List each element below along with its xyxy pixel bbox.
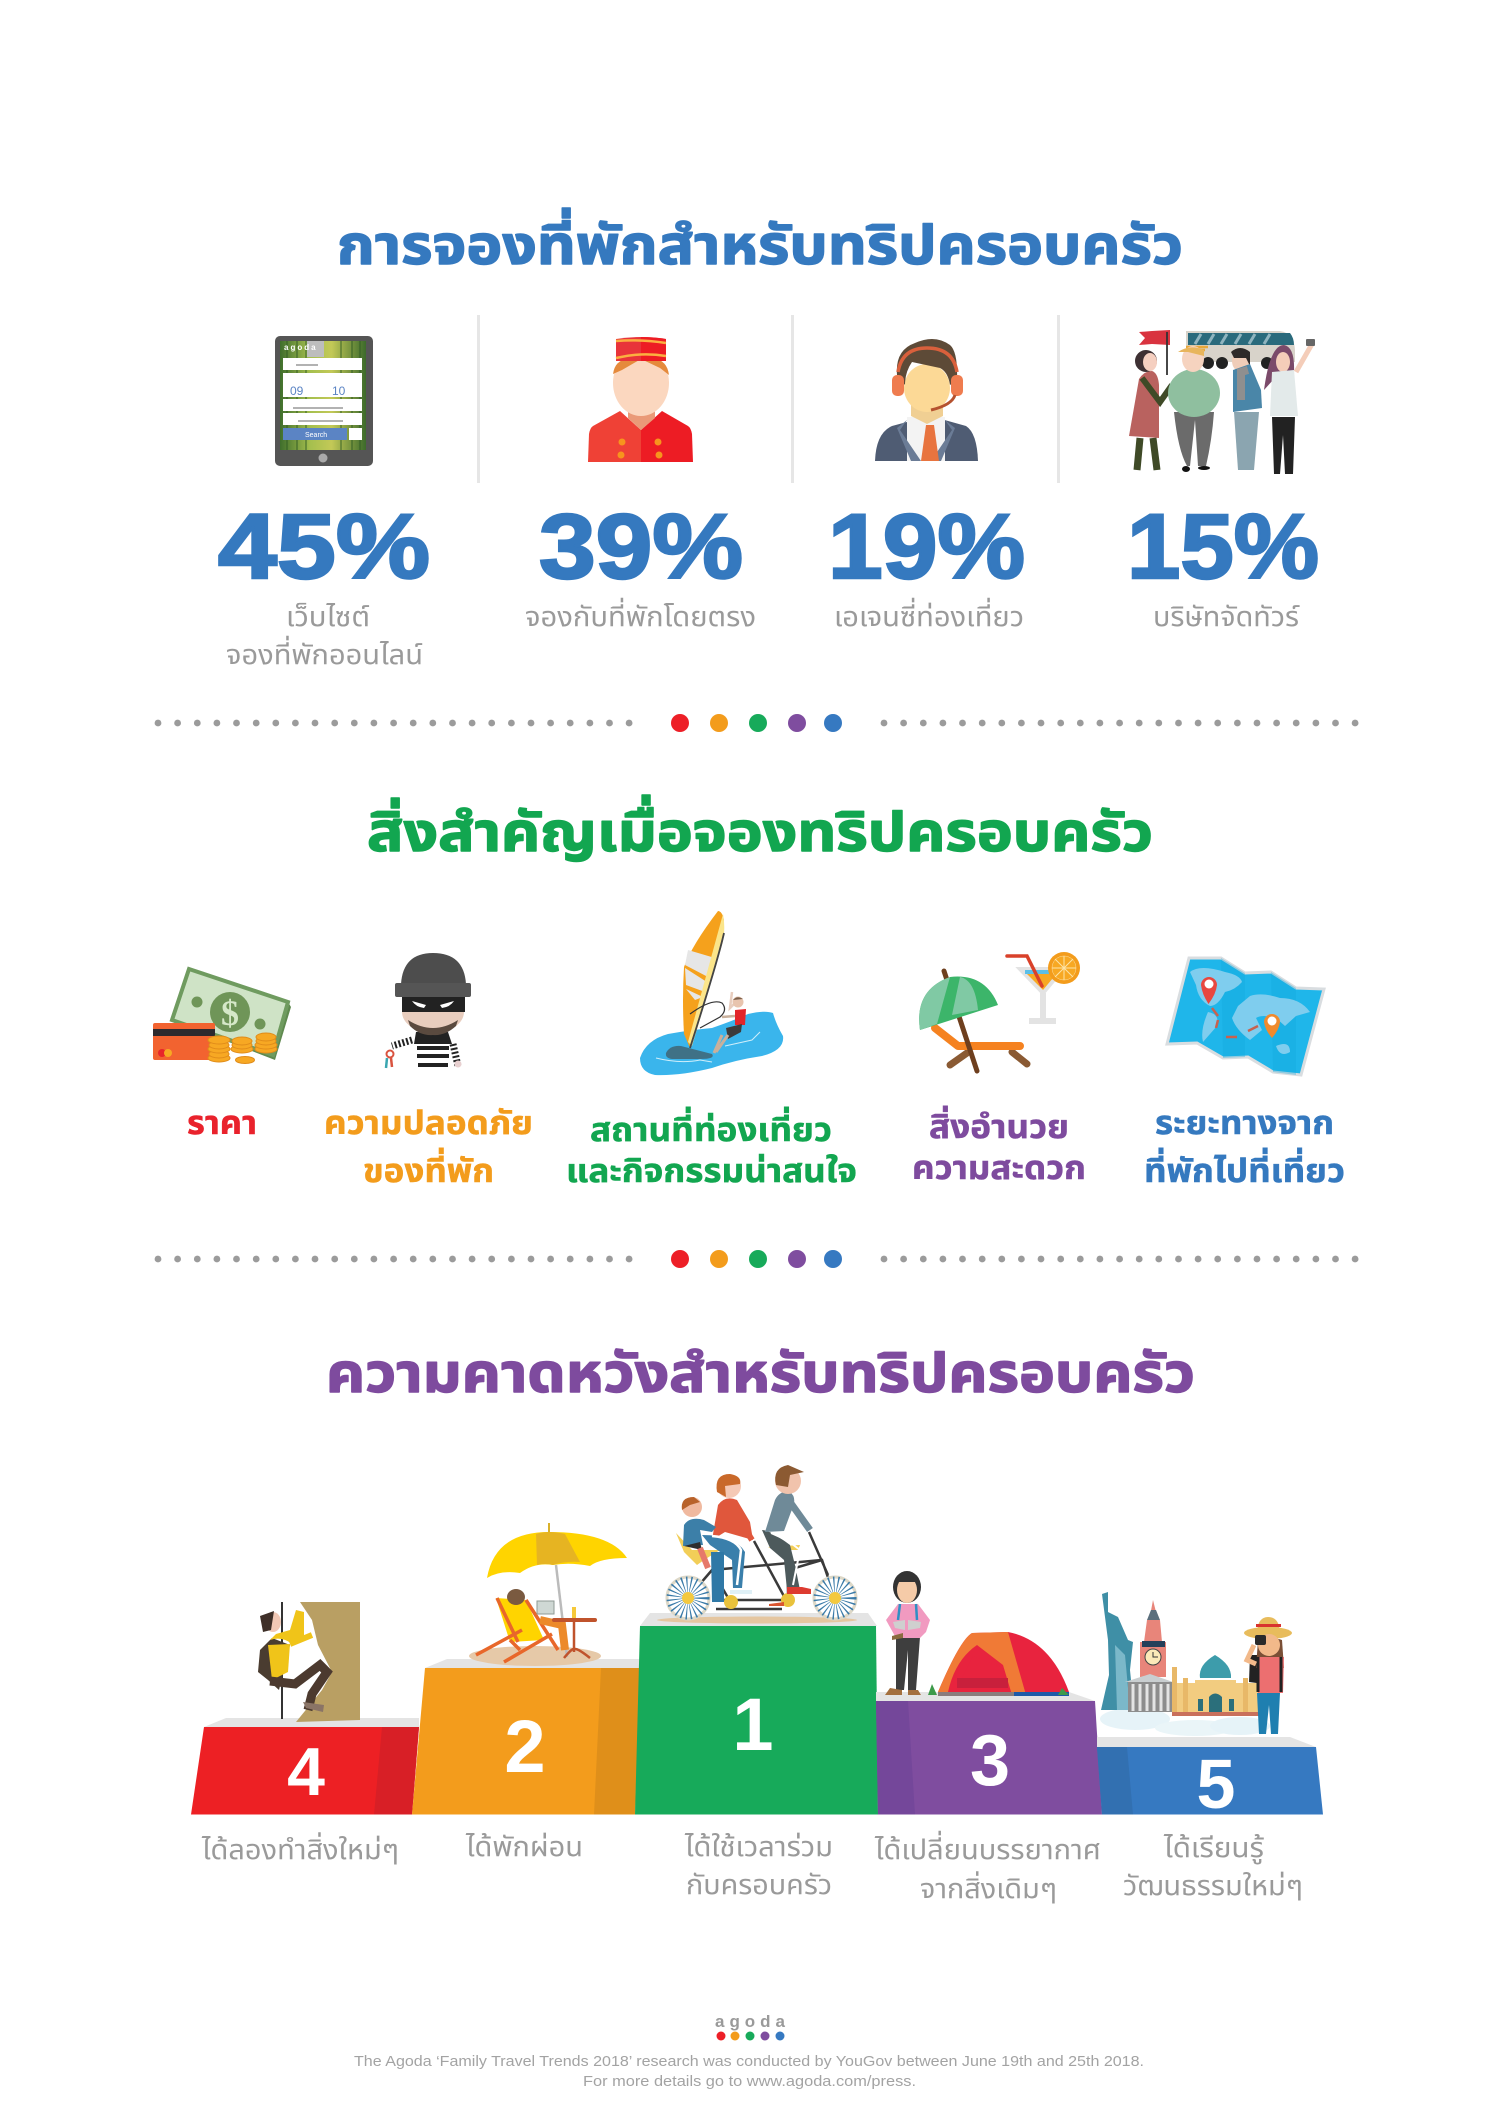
stat: 15%: 15%: [1127, 496, 1319, 598]
podium step 4: red: [191, 1718, 419, 1814]
label: direct booking: จองกับที่พักโดยตรง: [525, 597, 756, 632]
icon: windsurfer: [640, 911, 783, 1075]
footer: agoda logo and source: [354, 2012, 1144, 2090]
icon: tablet booking site: Search: [305, 432, 327, 439]
label: safety of the accommodation: [324, 1104, 533, 1189]
icon: tour group with bus: [1129, 330, 1315, 474]
illustration: rock climber: [258, 1602, 360, 1722]
label: spend time with family: กับครอบครัว: [686, 1869, 832, 1900]
label: distance to attractions: ระยะทางจาก: [1155, 1104, 1334, 1141]
source note: For more details go to www.agoda.com/press.: [583, 2073, 916, 2090]
label: spend time with family: ได้ใช้เวลาร่วม: [684, 1831, 833, 1862]
stat: 19%: 19%: [828, 496, 1025, 598]
icon: thief with keys: [386, 953, 471, 1068]
icon: tablet booking site: [275, 336, 373, 466]
icon: tablet booking site: 09: [290, 384, 304, 398]
stat: 45%: 45%: [218, 496, 430, 598]
label: amenities and convenience: ความสะดวก: [912, 1149, 1086, 1186]
label: safety of the accommodation: ของที่พัก: [363, 1147, 494, 1189]
logo: agoda: agoda: [715, 2012, 786, 2031]
label: change of scenery: [874, 1830, 1101, 1904]
illustration: hiker with map and tent: [885, 1571, 1069, 1696]
label: relax: ได้พักผ่อน: [465, 1831, 583, 1862]
podium step 1: green: 1: [732, 1683, 774, 1766]
heading: expectations: ความคาดหวังสำหรับทริปครอบครัว: [326, 1344, 1195, 1404]
icon: call-centre agent: [875, 339, 978, 461]
label: price: ราคา: [187, 1104, 257, 1141]
icon: money, card and coins: $: [221, 993, 239, 1033]
icon: beach chair and cocktail: [919, 952, 1080, 1071]
label: distance to attractions: ที่พักไปที่เที่ยว: [1144, 1147, 1345, 1189]
icon: money, card and coins: [153, 969, 291, 1064]
icon: world map with pins: [1167, 958, 1324, 1075]
label: distance to attractions: [1144, 1104, 1345, 1189]
icon: tablet booking site: agoda: [284, 343, 318, 352]
label: learn new cultures: [1123, 1832, 1303, 1901]
label: amenities and convenience: [912, 1105, 1086, 1186]
label: change of scenery: จากสิ่งเดิมๆ: [920, 1871, 1057, 1904]
panel: expectations podium: [191, 1344, 1323, 1904]
panel: booking channels: [218, 208, 1319, 670]
label: online booking sites: เว็บไซต์: [286, 601, 370, 632]
label: online booking sites: จองที่พักออนไลน์: [226, 635, 423, 670]
podium step 2: orange: 2: [504, 1705, 546, 1788]
label: safety of the accommodation: ความปลอดภัย: [324, 1104, 533, 1141]
podium step 5: blue: 5: [1197, 1745, 1235, 1823]
illustration: family on a tandem bicycle: [657, 1465, 857, 1624]
podium step 5: blue: [1097, 1737, 1323, 1823]
label: attractions and activities: และกิจกรรมน่าสนใจ: [566, 1152, 857, 1189]
icon: tablet booking site: 10: [332, 384, 346, 398]
label: attractions and activities: [566, 1106, 857, 1189]
label: spend time with family: [684, 1831, 833, 1900]
podium step 2: orange: [412, 1659, 640, 1814]
heading: priorities: สิ่งสำคัญเมื่อจองทริปครอบครัว: [367, 795, 1153, 863]
label: travel agency: เอเจนซี่ท่องเที่ยว: [834, 597, 1024, 632]
label: learn new cultures: วัฒนธรรมใหม่ๆ: [1123, 1870, 1303, 1901]
podium step 3: purple: [876, 1692, 1102, 1814]
label: tour company: บริษัทจัดทัวร์: [1153, 601, 1300, 632]
source note: The Agoda ‘Family Travel Trends 2018’ research was conducted by YouGov between June 19th and 25th 2018.: [354, 2053, 1144, 2070]
logo: agoda: [715, 2012, 786, 2040]
illustration: relaxing under a beach umbrella: [469, 1523, 627, 1666]
heading: booking: การจองที่พักสำหรับทริปครอบครัว: [337, 208, 1183, 276]
label: attractions and activities: สถานที่ท่องเที่ยว: [590, 1106, 832, 1148]
panel: priorities when booking: [153, 795, 1345, 1189]
label: try something new: ได้ลองทำสิ่งใหม่ๆ: [201, 1832, 399, 1865]
label: change of scenery: ได้เปลี่ยนบรรยากาศ: [874, 1830, 1101, 1865]
icon: bellboy: [588, 337, 693, 462]
podium step 4: red: 4: [287, 1734, 325, 1810]
label: online booking sites: [226, 601, 423, 670]
stat: 39%: 39%: [539, 496, 743, 598]
illustration: landmarks and tourist: [1100, 1592, 1292, 1736]
podium step 1: green: [635, 1613, 878, 1814]
podium step 3: purple: 3: [970, 1721, 1010, 1801]
label: amenities and convenience: สิ่งอำนวย: [929, 1105, 1069, 1145]
source note: [354, 2053, 1144, 2090]
label: learn new cultures: ได้เรียนรู้: [1163, 1832, 1264, 1865]
